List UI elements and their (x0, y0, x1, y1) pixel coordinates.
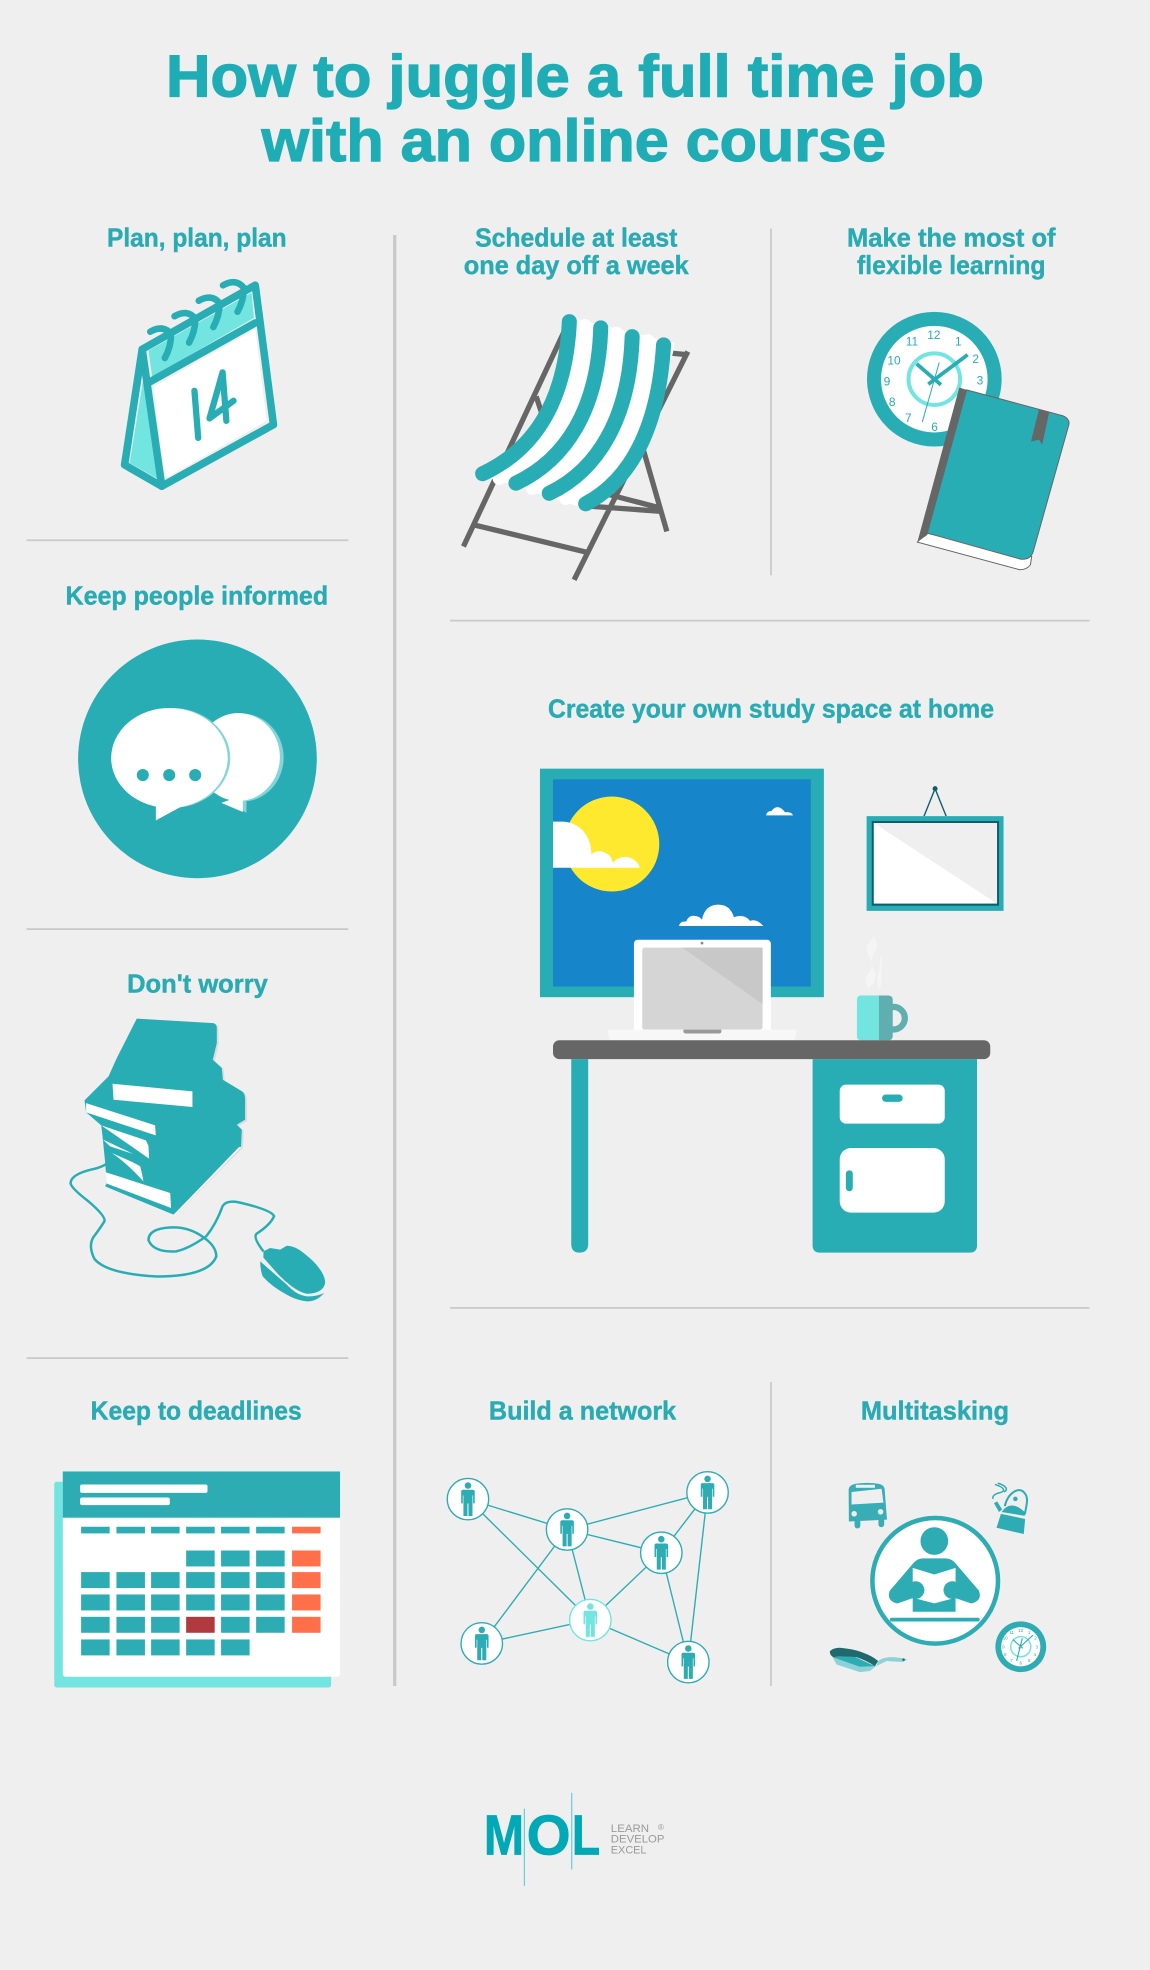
icon: small clock: 12 (1018, 1628, 1024, 1633)
icon: wall clock: 6 (931, 420, 938, 434)
heading: day off: one day off a week (464, 252, 689, 280)
heading: don't worry: Don't worry (127, 971, 268, 999)
logo: MOL: EXCEL (611, 1844, 646, 1856)
icon: wall clock: 11 (906, 335, 919, 349)
title: with an online course (260, 108, 886, 174)
icon: notebook (917, 387, 1069, 570)
logo: MOL: O (527, 1803, 571, 1866)
framed picture (867, 786, 1004, 911)
heading: keep people informed: Keep people informed (66, 582, 328, 610)
icon: small clock: 7 (1010, 1658, 1013, 1663)
icon: wall clock: 2 (972, 352, 979, 366)
laptop (608, 940, 797, 1040)
icon: wall clock: 9 (884, 375, 891, 389)
logo: MOL: L (572, 1803, 600, 1866)
heading: flexible learning: flexible learning (857, 252, 1046, 280)
coffee mug (857, 936, 905, 1040)
logo: MOL: DEVELOP (611, 1834, 664, 1846)
icon: person reading (872, 1518, 998, 1644)
logo: MOL (484, 1793, 664, 1886)
window with sky (540, 769, 824, 997)
logo: MOL: LEARN (611, 1823, 649, 1835)
icon: bus (849, 1483, 887, 1528)
icon: frying pan (830, 1648, 907, 1672)
illustration: study desk scene (540, 769, 1004, 1253)
icon: small clock: 4 (1034, 1652, 1037, 1657)
icon: wall clock (867, 312, 1002, 447)
icon: speech bubbles (78, 639, 317, 878)
icon: wall clock: 3 (977, 373, 984, 387)
logo: MOL: M (484, 1803, 524, 1866)
heading: build a network: Build a network (489, 1398, 677, 1426)
icon: small clock: 1 (1028, 1630, 1031, 1635)
icon: small clock: 10 (1003, 1636, 1008, 1641)
icon: wall clock: 12 (927, 328, 941, 342)
icon: small clock: 11 (1009, 1630, 1014, 1635)
heading: flexible learning (847, 224, 1056, 280)
diagram: people network (447, 1472, 728, 1683)
desk (553, 1040, 990, 1253)
title (166, 44, 984, 174)
icon: small clock: 6 (1020, 1661, 1023, 1666)
icon: wall clock: 10 (887, 353, 901, 367)
logo: MOL: ® (658, 1823, 664, 1832)
icon: small clock: 3 (1035, 1644, 1038, 1649)
icon: small clock: 5 (1028, 1658, 1031, 1663)
icon: small clock (995, 1621, 1046, 1672)
heading: keep to deadlines: Keep to deadlines (91, 1398, 302, 1426)
icon: wall clock: 8 (889, 395, 896, 409)
icon: desk calendar (125, 282, 273, 486)
icon: small clock: 9 (1002, 1644, 1005, 1649)
icon: wall clock: 7 (905, 411, 912, 425)
heading: day off (464, 224, 689, 280)
title: How to juggle a full time job (166, 44, 984, 110)
icon: wall clock: 1 (955, 335, 962, 349)
heading: study space: Create your own study space at home (548, 695, 994, 723)
heading: plan: Plan, plan, plan (107, 224, 287, 252)
heading: flexible learning: Make the most of (847, 224, 1056, 252)
icon: small clock: 2 (1034, 1636, 1037, 1641)
icon: wall planner calendar (54, 1471, 340, 1687)
icon: books with computer mouse (71, 1019, 325, 1301)
heading: multitasking: Multitasking (861, 1398, 1009, 1426)
icon: small clock: 8 (1004, 1652, 1007, 1657)
heading: day off: Schedule at least (475, 224, 678, 252)
icon: kettle (993, 1483, 1027, 1534)
icon: deck chair (463, 317, 688, 580)
